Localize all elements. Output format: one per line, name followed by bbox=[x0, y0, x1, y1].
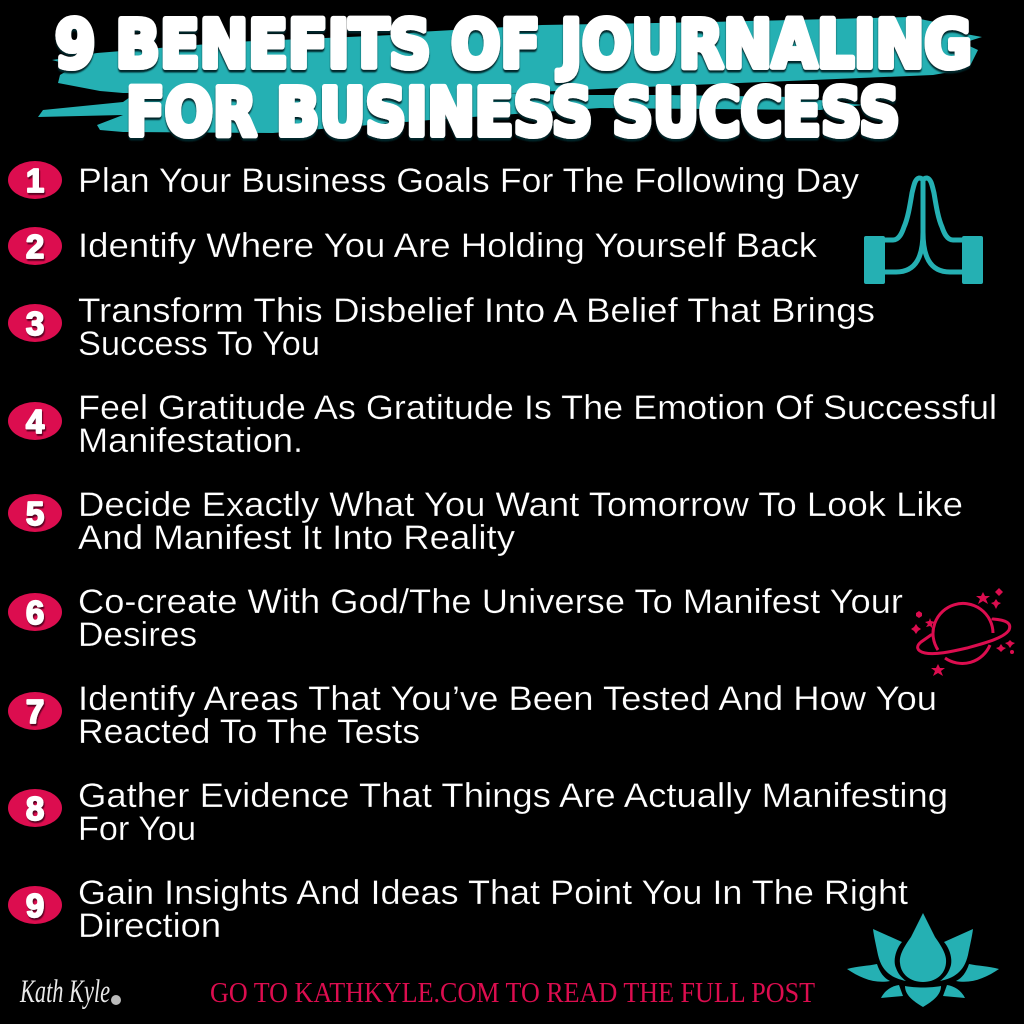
item 3: Transform This Disbelief Into A Belief That Brings bbox=[78, 292, 875, 330]
item 4 bbox=[8, 389, 997, 460]
item 7: 7 bbox=[26, 693, 44, 730]
item 4: 4 bbox=[26, 403, 45, 440]
item 1: Plan Your Business Goals For The Following Day bbox=[78, 162, 859, 200]
item 6 bbox=[8, 583, 903, 654]
title: FOR BUSINESS SUCCESS bbox=[126, 74, 900, 151]
item 5 bbox=[8, 486, 963, 557]
item 9: Direction bbox=[78, 907, 221, 945]
item 3: Success To You bbox=[78, 325, 320, 363]
item 8 bbox=[8, 777, 948, 848]
item 7: Identify Areas That You’ve Been Tested And How You bbox=[78, 680, 937, 718]
item 4: Manifestation. bbox=[78, 422, 303, 460]
item 9: Gain Insights And Ideas That Point You In The Right bbox=[78, 874, 909, 912]
item 7 bbox=[8, 680, 937, 751]
item 5: And Manifest It Into Reality bbox=[78, 519, 515, 557]
item 4: Feel Gratitude As Gratitude Is The Emotion Of Successful bbox=[78, 389, 997, 427]
item 3: 3 bbox=[26, 305, 44, 342]
item 3 bbox=[8, 292, 875, 363]
brush stroke behind title bbox=[38, 17, 982, 133]
item 7: Reacted To The Tests bbox=[78, 713, 420, 751]
item 6: 6 bbox=[26, 594, 44, 631]
icon: lotus flower bbox=[847, 913, 999, 1007]
item 9 bbox=[8, 874, 909, 945]
item 6: Desires bbox=[78, 616, 197, 654]
item 8: 8 bbox=[26, 790, 44, 827]
item 5: 5 bbox=[26, 495, 44, 532]
icon: ringed planet bbox=[911, 588, 1015, 676]
title bbox=[55, 6, 972, 151]
logo: Kath Kyle: Kath Kyle bbox=[19, 974, 110, 1010]
item 2: 2 bbox=[26, 228, 44, 265]
item 2: Identify Where You Are Holding Yourself Back bbox=[78, 227, 818, 265]
item 8: For You bbox=[78, 810, 196, 848]
icon: praying hands bbox=[864, 178, 983, 284]
item 8: Gather Evidence That Things Are Actually Manifesting bbox=[78, 777, 948, 815]
footer call to action: GO TO KATHKYLE.COM TO READ THE FULL POST bbox=[210, 977, 815, 1009]
item 6: Co-create With God/The Universe To Manifest Your bbox=[78, 583, 903, 621]
item 5: Decide Exactly What You Want Tomorrow To Look Like bbox=[78, 486, 963, 524]
item 9: 9 bbox=[26, 887, 44, 924]
item 1: 1 bbox=[26, 162, 44, 199]
